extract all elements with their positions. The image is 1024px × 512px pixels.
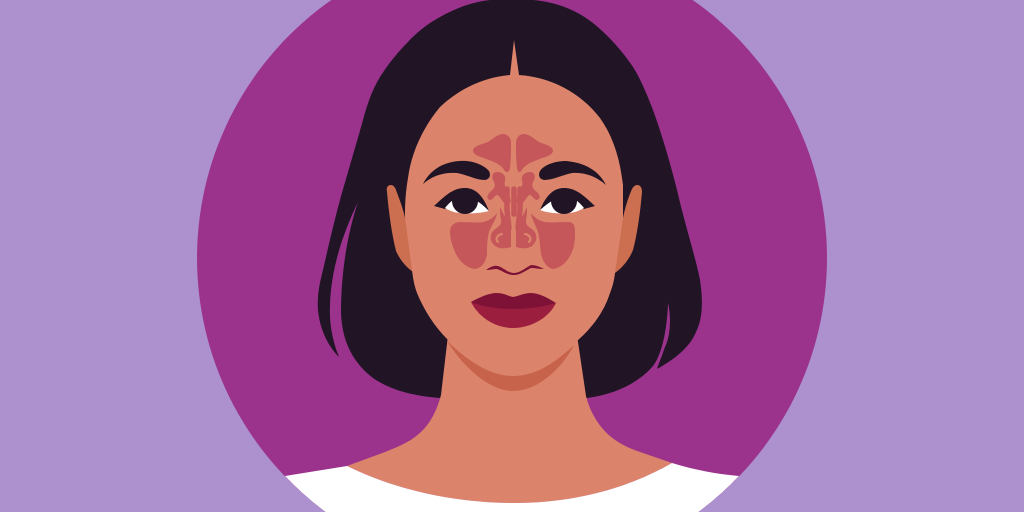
face (405, 40, 623, 376)
right curl (525, 234, 530, 242)
hair (318, 0, 702, 398)
lips (471, 293, 556, 328)
purple circle (197, 0, 827, 512)
right eye (540, 188, 595, 214)
left eye (434, 188, 489, 214)
ears (387, 185, 642, 273)
right eyebrow (539, 161, 606, 185)
ethmoid left (487, 172, 511, 203)
chin shadow (447, 341, 574, 391)
upper lip (471, 293, 556, 309)
ethmoid right (516, 172, 540, 203)
maxillary sinus right (531, 213, 575, 269)
left lower turbinate (491, 207, 511, 248)
right stem (518, 189, 520, 228)
right ear (608, 185, 642, 273)
sinuses (450, 134, 575, 269)
neck and chest (347, 335, 672, 503)
frontal sinus right (516, 134, 553, 172)
left curl (497, 234, 502, 242)
shirt (285, 463, 739, 512)
nasal stems (507, 189, 520, 228)
right lower turbinate (516, 207, 536, 248)
left stem (507, 189, 509, 228)
turbinate curls (497, 234, 530, 242)
left eyebrow (423, 161, 490, 184)
lower lip (471, 302, 556, 328)
left ear (387, 185, 418, 272)
nose (486, 265, 544, 275)
centre stem (511, 189, 517, 214)
maxillary sinus left (450, 213, 497, 269)
frontal sinus left (473, 134, 511, 172)
